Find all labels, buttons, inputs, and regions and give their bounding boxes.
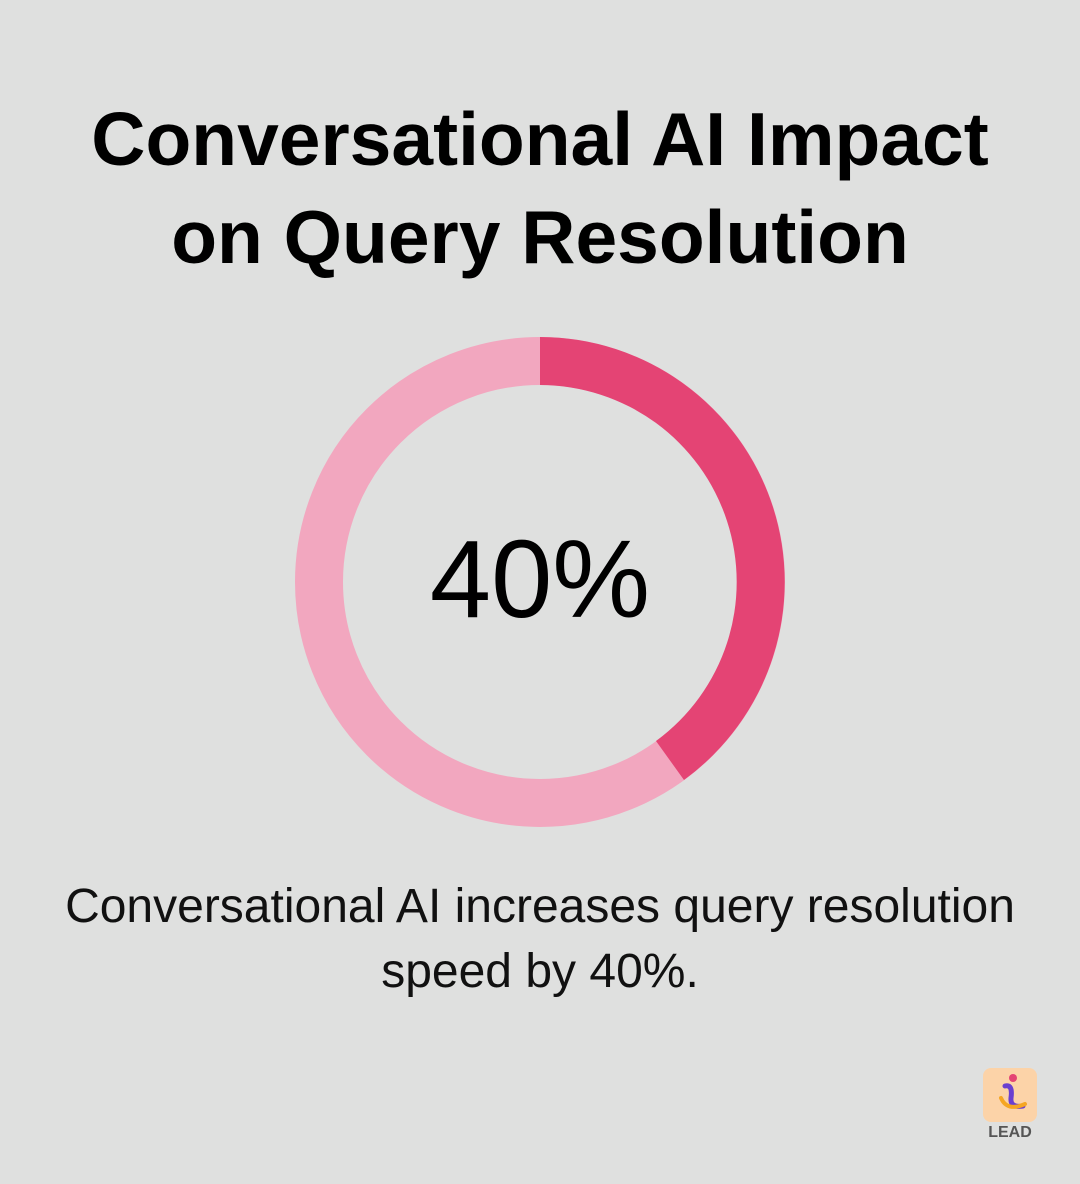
title: Conversational AI Impact (91, 97, 989, 181)
logo icon (983, 1068, 1037, 1122)
logo: LEAD (983, 1068, 1037, 1141)
title (91, 97, 989, 279)
logo text: LEAD (988, 1124, 1032, 1141)
ring: 40% share (540, 337, 785, 780)
center value: 40% (430, 518, 650, 641)
description text: speed by 40%. (381, 945, 699, 998)
description text: Conversational AI increases query resolution (65, 880, 1015, 933)
description text (65, 880, 1015, 998)
ring: remaining share (319, 361, 761, 803)
title: on Query Resolution (171, 195, 909, 279)
